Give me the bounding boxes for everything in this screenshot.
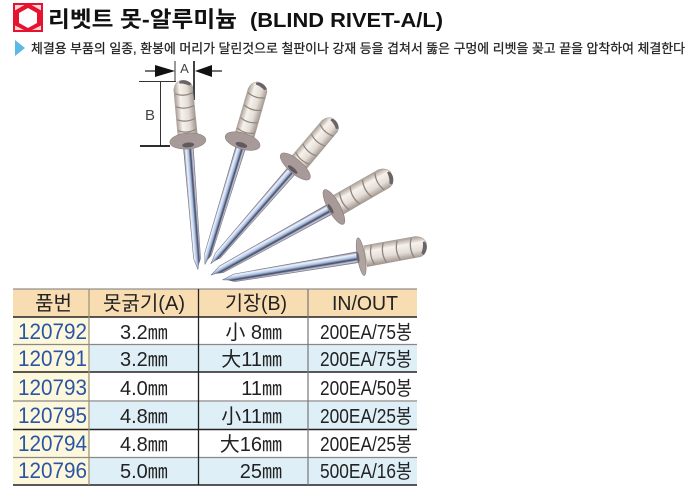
rivet lengths: 大16㎜ bbox=[220, 433, 282, 456]
header labels: IN/OUT bbox=[332, 293, 398, 315]
dimension B: B bbox=[145, 107, 155, 124]
rivet diameters: 4.8㎜ bbox=[120, 434, 168, 456]
package quantities: 200EA/75봉 bbox=[320, 349, 412, 371]
spec table bbox=[13, 289, 417, 485]
rivet 2 bbox=[188, 77, 278, 270]
package quantities: 200EA/25봉 bbox=[320, 406, 412, 428]
rivet 5 bbox=[219, 227, 430, 299]
item codes: 120796 bbox=[18, 458, 87, 483]
title: (BLIND RIVET-A/L) bbox=[250, 10, 443, 32]
header labels: 못굵기(A) bbox=[103, 292, 185, 315]
item codes: 120794 bbox=[18, 431, 87, 456]
header labels: 기장(B) bbox=[225, 292, 287, 315]
rivet lengths: 25㎜ bbox=[240, 461, 282, 483]
rivet diameters: 3.2㎜ bbox=[120, 322, 168, 344]
item codes: 120795 bbox=[18, 403, 87, 428]
dimension A: A bbox=[180, 61, 189, 76]
item codes: 120793 bbox=[18, 375, 87, 400]
rivet diameters: 4.8㎜ bbox=[120, 406, 168, 428]
package quantities bbox=[320, 322, 412, 483]
package quantities: 200EA/25봉 bbox=[320, 434, 412, 456]
dimension A bbox=[145, 61, 222, 100]
item codes bbox=[18, 319, 87, 483]
table header background bbox=[13, 289, 417, 317]
icon: blue triangle bullet bbox=[15, 40, 25, 56]
rivet 1 bbox=[165, 79, 216, 271]
rivet diameters: 4.0㎜ bbox=[120, 378, 168, 400]
title: 리벳트 못-알루미늄 bbox=[48, 7, 237, 32]
description text: 체결용 부품의 일종, 환봉에 머리가 달린것으로 철판이나 강재 등을 겹쳐서 뚫은 구멍에 리벳을 꽂고 끝을 압착하여 체결한다 bbox=[31, 41, 685, 56]
shaded rows bbox=[89, 345, 417, 485]
header labels bbox=[35, 292, 398, 315]
dimension B bbox=[139, 81, 176, 146]
item codes: 120792 bbox=[18, 319, 87, 344]
rivet 3 bbox=[196, 108, 350, 276]
rivet lengths: 小11㎜ bbox=[221, 405, 282, 428]
rivet lengths: 小 8㎜ bbox=[225, 321, 282, 344]
rivet lengths bbox=[220, 321, 282, 483]
package quantities: 500EA/16봉 bbox=[320, 461, 412, 483]
header labels: 품번 bbox=[35, 292, 72, 315]
icon: red hexagon nut logo bbox=[13, 3, 43, 32]
package quantities: 200EA/50봉 bbox=[320, 378, 412, 400]
rivet lengths: 11㎜ bbox=[241, 378, 282, 400]
rivet diameters: 5.0㎜ bbox=[120, 461, 168, 483]
rivet diameters: 3.2㎜ bbox=[120, 349, 168, 371]
item codes: 120791 bbox=[18, 346, 87, 371]
code column background bbox=[13, 317, 89, 485]
package quantities: 200EA/75봉 bbox=[320, 322, 412, 344]
title bbox=[48, 7, 443, 32]
rivet diameters bbox=[120, 322, 168, 483]
rivet 4 bbox=[201, 158, 402, 292]
rivet lengths: 大11㎜ bbox=[221, 348, 282, 371]
